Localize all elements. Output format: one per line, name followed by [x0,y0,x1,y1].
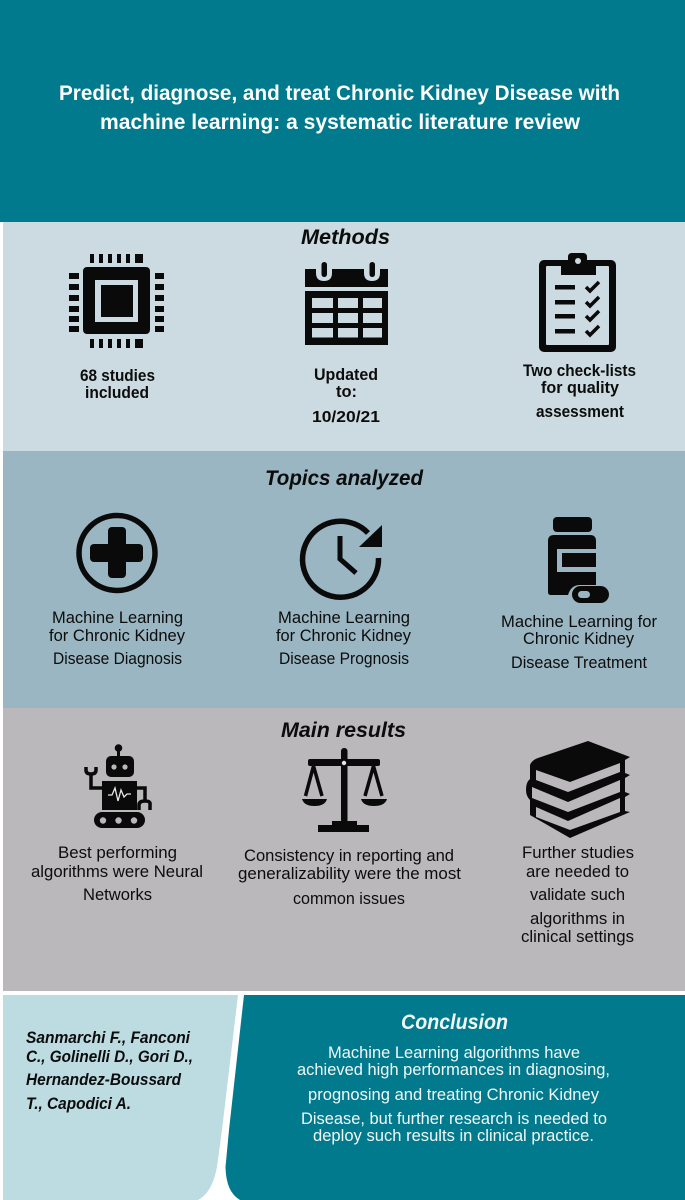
text: 68 studies included [80,367,155,402]
text: author list: T., Capodici A. [26,1095,131,1113]
text: further studies: algorithms in [530,910,625,928]
text: updated to 10/20/21 [312,366,380,426]
text: updated to 10/20/21: Updated [314,366,378,384]
icon: medical cross [79,516,155,590]
text: two check-lists [523,362,636,421]
text: prognosis: Disease Prognosis [279,650,409,668]
text: neural networks: algorithms were Neural [31,863,203,881]
icon: stack of books [526,741,630,838]
text: further studies: validate such [530,886,625,904]
text: consistency: generalizability were the most [238,865,461,883]
text: author list: C., Golinelli D., Gori D., [26,1048,193,1066]
text: 68 studies included: 68 studies [80,367,155,385]
text: conclusion body: prognosing and treating Chronic Kidney [308,1086,600,1104]
text: conclusion body: Disease, but further research is needed to [301,1110,607,1128]
heading: main results: Main results [281,719,406,742]
icon: balance scale [302,748,387,832]
text: diagnosis: Machine Learning [52,609,183,627]
text: treatment: Machine Learning for [501,613,658,631]
text: prognosis [276,609,412,668]
text: two check-lists: for quality [541,379,620,397]
text: diagnosis [49,609,186,668]
icon: clock with arrow [303,521,382,597]
text: further studies: Further studies [522,844,634,862]
text: conclusion body [297,1044,610,1145]
text: further studies [521,844,634,946]
text: two check-lists: assessment [536,403,624,421]
text: diagnosis: Disease Diagnosis [53,650,182,668]
heading: topics analyzed: Topics analyzed [265,467,424,490]
text: author list [26,1029,193,1113]
text: 68 studies included: included [85,384,149,402]
icon: robot [86,744,150,828]
icon: calendar [305,262,388,345]
text: conclusion body: deploy such results in clinical practice. [313,1127,594,1145]
title [59,81,620,134]
text: diagnosis: for Chronic Kidney [49,627,186,645]
heading: conclusion: Conclusion [401,1011,508,1034]
text: prognosis: for Chronic Kidney [276,627,412,645]
text: further studies: are needed to [526,863,629,881]
heading: methods: Methods [301,226,390,249]
title: Predict, diagnose, and treat Chronic Kidney Disease with [59,81,620,105]
text: treatment: Disease Treatment [511,654,647,672]
text: author list: Hernandez-Boussard [26,1071,182,1089]
title: machine learning: a systematic literature review [100,110,580,134]
panel: authors [3,995,238,1200]
text: further studies: clinical settings [521,928,634,946]
header banner [0,0,685,222]
text: consistency: common issues [293,890,405,908]
text: updated to 10/20/21: 10/20/21 [312,409,380,426]
text: author list: Sanmarchi F., Fanconi [26,1029,190,1047]
text: consistency: Consistency in reporting and [244,847,454,865]
panel: topics analyzed [3,451,685,708]
text: two check-lists: Two check-lists [523,362,636,380]
text: treatment [501,613,658,672]
panel: conclusion [226,995,685,1200]
text: neural networks: Best performing [58,844,177,862]
panel: main results [3,708,685,991]
panel: methods [3,222,685,451]
icon: pill bottle [548,517,609,603]
text: conclusion body: Machine Learning algorithms have [328,1044,580,1062]
text: treatment: Chronic Kidney [523,630,635,648]
text: consistency [238,847,461,908]
text: prognosis: Machine Learning [278,609,410,627]
icon: microchip [69,254,164,348]
text: neural networks [31,844,203,904]
icon: clipboard checklist [539,253,616,352]
text: conclusion body: achieved high performances in diagnosing, [297,1061,610,1079]
text: neural networks: Networks [83,886,152,904]
text: updated to 10/20/21: to: [336,383,357,401]
